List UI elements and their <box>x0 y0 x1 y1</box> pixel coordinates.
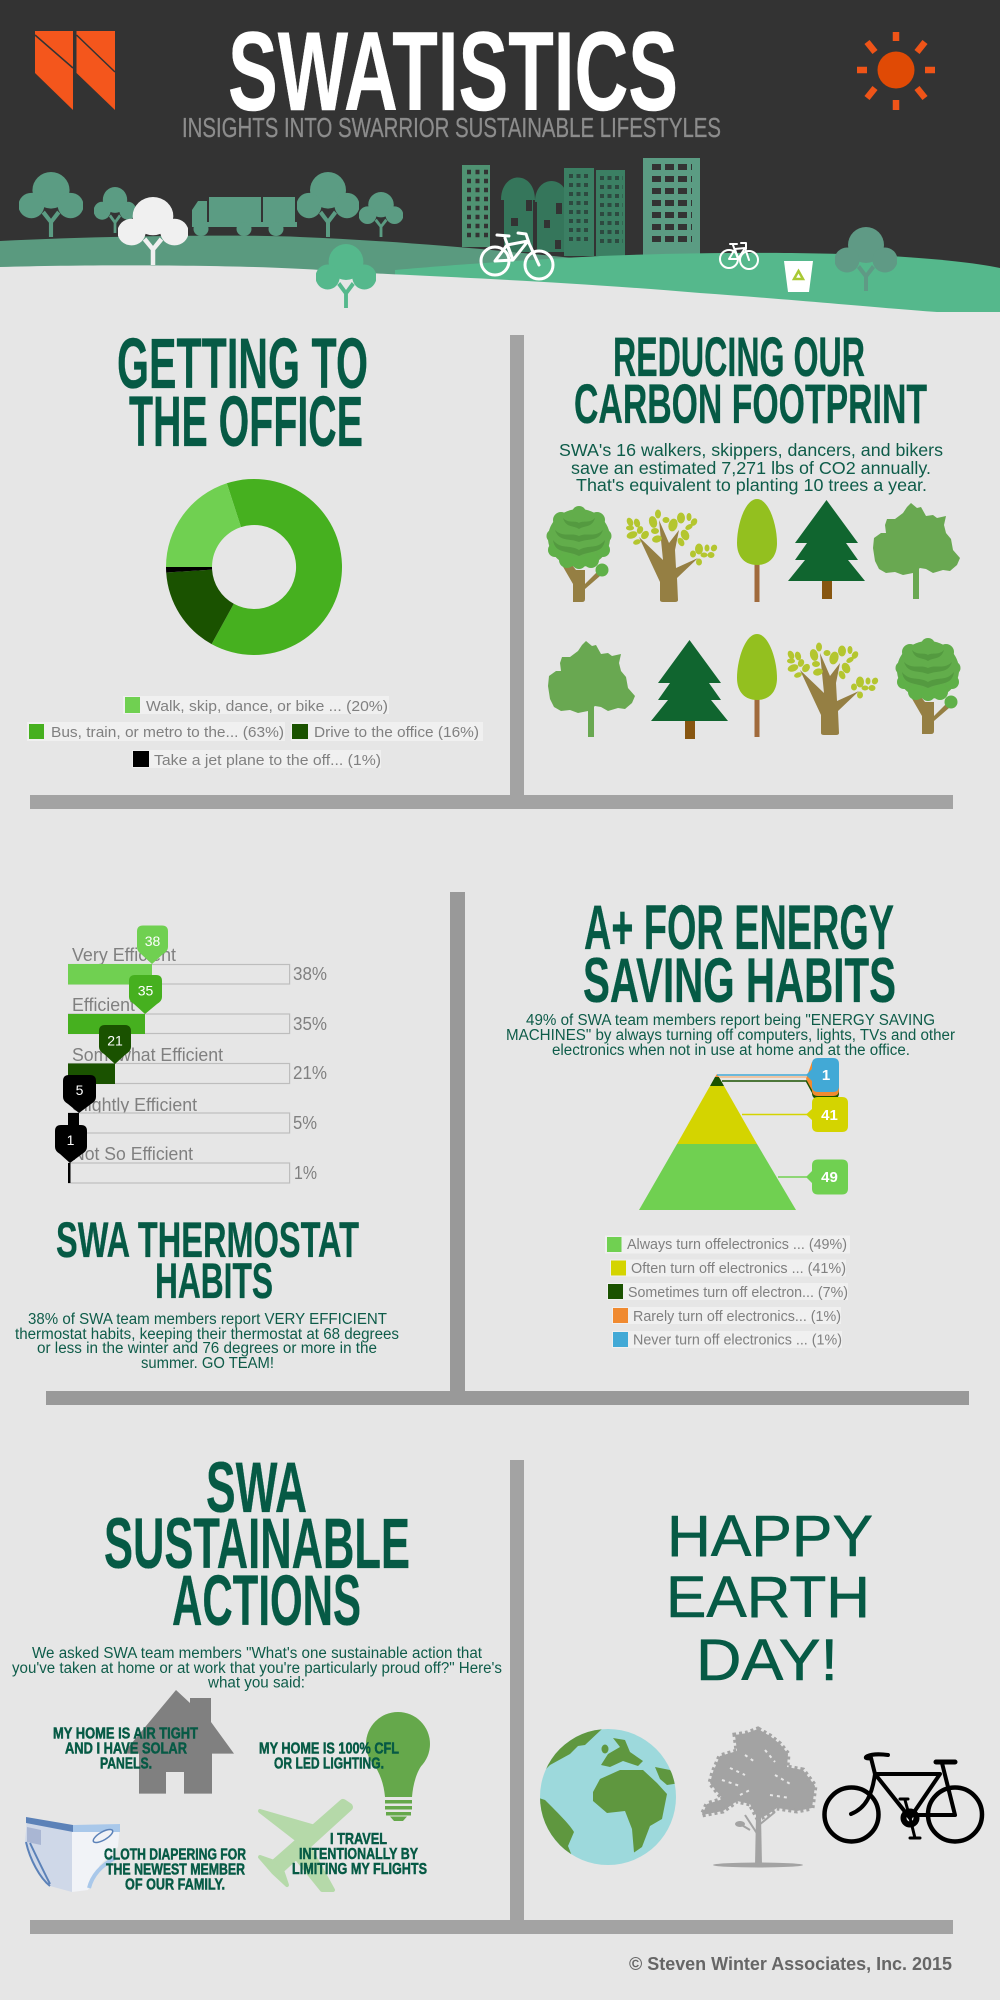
heading <box>104 1449 410 1641</box>
icon: ten trees <box>546 499 960 739</box>
callout: 35 <box>129 975 162 1014</box>
panel: reducing our carbon footprint <box>546 325 960 739</box>
header banner <box>0 0 1000 330</box>
panel divider: middle row <box>46 892 969 1405</box>
legend <box>605 1236 850 1348</box>
action: home air tight: AND I HAVE SOLAR <box>65 1740 187 1758</box>
panel: energy saving habits <box>506 893 955 1348</box>
legend: Drive to the office (16%) <box>314 724 479 741</box>
callout: 38 <box>137 926 168 964</box>
text block: what you said: <box>207 1674 305 1692</box>
action: cloth diapering: THE NEWEST MEMBER <box>106 1862 245 1878</box>
bar chart: 5% <box>293 1113 317 1133</box>
text block <box>12 1645 502 1692</box>
legend: Sometimes turn off electron... (7%) <box>628 1285 848 1301</box>
legend: Bus, train, or metro to the... (63%) <box>51 724 284 741</box>
icon: house <box>123 1690 234 1794</box>
action: home air tight: MY HOME IS AIR TIGHT <box>53 1726 198 1742</box>
large white bicycle <box>481 233 553 279</box>
city buildings <box>462 158 700 265</box>
near hill <box>395 253 1000 320</box>
ground <box>0 265 1000 330</box>
action: home air tight <box>53 1726 198 1772</box>
icon: grey tree <box>702 1729 815 1868</box>
panel: thermostat habits <box>15 926 399 1372</box>
heading: HAPPY <box>667 1504 873 1569</box>
donut chart <box>166 479 342 655</box>
panel divider: top row <box>30 335 953 809</box>
truck <box>192 197 297 236</box>
action: limiting flights: LIMITING MY FLIGHTS <box>292 1861 427 1878</box>
callout: 1 <box>55 1125 87 1163</box>
callout: 21 <box>99 1025 131 1064</box>
icon: airplane <box>260 1803 349 1890</box>
action: limiting flights <box>292 1831 427 1878</box>
text block: MACHINES" by always turning off computers, lights, TVs and other <box>506 1027 955 1044</box>
legend: Never turn off electronics ... (1%) <box>633 1332 842 1348</box>
legend: Often turn off electronics ... (41%) <box>631 1261 846 1277</box>
legend: Take a jet plane to the off... (1%) <box>154 752 381 769</box>
callout: 41: 41 <box>821 1107 838 1124</box>
action: limiting flights: I TRAVEL <box>330 1831 387 1848</box>
callout: 35: 35 <box>138 982 153 998</box>
legend <box>27 696 483 769</box>
text block: electronics when not in use at home and at the office. <box>552 1042 910 1059</box>
text block <box>15 1311 399 1372</box>
icon: black bicycle <box>824 1754 982 1842</box>
text block: save an estimated 7,271 lbs of CO2 annually. <box>571 458 931 478</box>
heading <box>574 325 927 435</box>
text block: 49% of SWA team members report being "ENERGY SAVING <box>526 1012 935 1029</box>
heading: DAY! <box>696 1628 838 1693</box>
small white bicycle <box>720 243 758 269</box>
bar chart: Slightly Efficient <box>72 1095 197 1115</box>
bar chart: Very Efficient <box>72 945 176 965</box>
heading: GETTING TO <box>117 325 368 404</box>
action: lighting: MY HOME IS 100% CFL <box>259 1740 399 1758</box>
heading <box>583 893 896 1016</box>
action: lighting <box>259 1740 399 1772</box>
bar chart: 21% <box>293 1063 327 1083</box>
icon: light bulb <box>366 1712 430 1821</box>
title: SWATISTICS <box>228 9 678 134</box>
pyramid chart <box>639 1058 848 1210</box>
panel: happy earth day <box>530 1504 982 1868</box>
far hill <box>0 236 610 300</box>
panel divider: bottom row <box>30 1460 953 1934</box>
callout: 1 stack <box>806 1058 839 1099</box>
heading: HABITS <box>155 1253 273 1309</box>
action: limiting flights: INTENTIONALLY BY <box>299 1846 418 1863</box>
bar chart <box>55 926 327 1183</box>
text block: or less in the winter and 76 degrees or more in the <box>37 1340 377 1357</box>
bar chart: Efficient <box>72 995 135 1015</box>
action: cloth diapering: CLOTH DIAPERING FOR <box>104 1846 246 1864</box>
text block: you've taken at home or at work that you're particularly proud off?" Here's <box>12 1660 502 1677</box>
callout: 1: 1 <box>67 1132 75 1148</box>
subtitle: INSIGHTS INTO SWARRIOR SUSTAINABLE LIFESTYLES <box>182 112 721 143</box>
text block <box>559 440 943 495</box>
text block: We asked SWA team members "What's one sustainable action that <box>32 1645 483 1662</box>
logo <box>35 31 115 110</box>
text block: thermostat habits, keeping their thermostat at 68 degrees <box>15 1326 399 1343</box>
callout: 49 <box>806 1160 848 1194</box>
panel: getting to the office <box>27 325 483 769</box>
text block: SWA's 16 walkers, skippers, dancers, and bikers <box>559 440 943 460</box>
text block <box>506 1012 955 1059</box>
bar chart: Not So Efficient <box>72 1144 193 1164</box>
action: cloth diapering: OF OUR FAMILY. <box>125 1876 225 1894</box>
heading: SUSTAINABLE <box>104 1505 410 1584</box>
white tree <box>117 197 189 265</box>
text block: That's equivalent to planting 10 trees a year. <box>576 475 927 495</box>
heading: SWA <box>206 1449 307 1528</box>
action: cloth diapering <box>104 1846 246 1894</box>
icon: globe <box>530 1729 680 1865</box>
action: lighting: OR LED LIGHTING. <box>274 1756 384 1772</box>
legend: Walk, skip, dance, or bike ... (20%) <box>146 698 388 715</box>
recycling cup <box>784 261 813 292</box>
footer credit: © Steven Winter Associates, Inc. 2015 <box>629 1954 952 1974</box>
callout: 21: 21 <box>107 1032 123 1048</box>
bar chart: 1% <box>294 1163 317 1183</box>
callout: 5: 5 <box>76 1082 84 1098</box>
right tree <box>834 227 898 291</box>
bar chart: 38% <box>293 964 327 984</box>
heading: EARTH <box>666 1565 870 1630</box>
heading <box>666 1504 873 1693</box>
bar chart: 35% <box>293 1014 327 1034</box>
heading <box>117 325 368 462</box>
heading: ACTIONS <box>172 1562 361 1641</box>
sun <box>857 32 935 110</box>
distant trees <box>18 172 403 237</box>
callout: 49: 49 <box>821 1169 838 1186</box>
legend: Always turn offelectronics ... (49%) <box>627 1237 847 1253</box>
text block: 38% of SWA team members report VERY EFFICIENT <box>28 1311 388 1328</box>
panel: sustainable actions <box>12 1449 502 1894</box>
callout: 41 <box>806 1097 848 1132</box>
callout: 5 <box>63 1075 96 1113</box>
icon: cloth diaper <box>25 1817 120 1892</box>
text block: summer. GO TEAM! <box>141 1355 274 1372</box>
heading: THE OFFICE <box>129 383 363 462</box>
heading: SWA THERMOSTAT <box>56 1212 359 1268</box>
legend: Rarely turn off electronics... (1%) <box>633 1309 841 1325</box>
callout: 38: 38 <box>145 933 160 949</box>
callout: 1 stack: 1 <box>822 1067 830 1084</box>
ground tree <box>316 244 376 308</box>
action: home air tight: PANELS. <box>100 1756 152 1772</box>
bar chart: Somewhat Efficient <box>72 1045 223 1065</box>
heading <box>56 1212 359 1309</box>
